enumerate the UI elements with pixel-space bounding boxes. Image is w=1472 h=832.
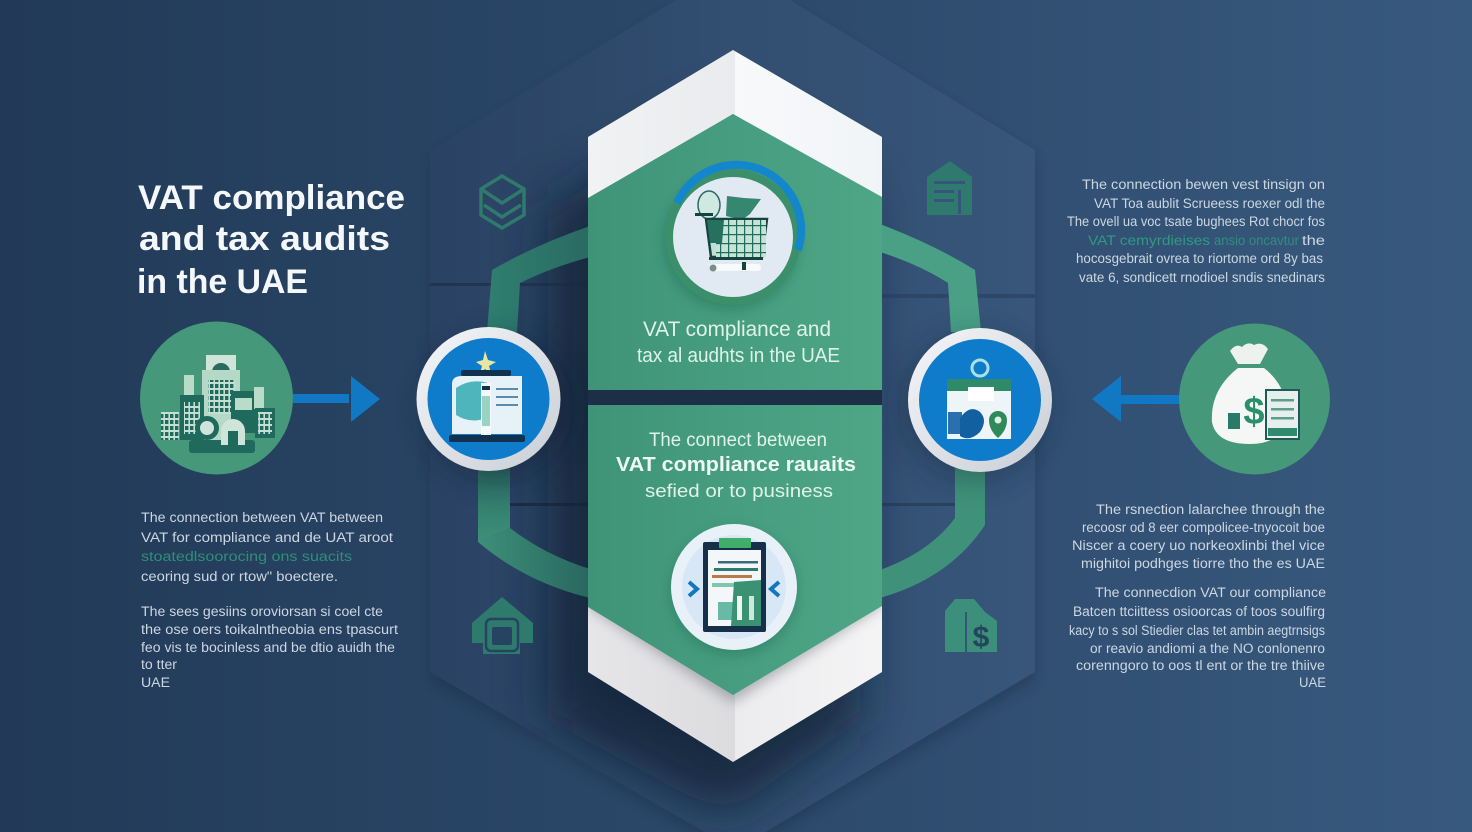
- icon: faint document building: [927, 161, 972, 215]
- icon: faint house: [472, 597, 533, 654]
- right lower text block 2: corenngoro to oos tl ent or the tre thiive: [1076, 658, 1325, 673]
- left green circle with buildings icon: [140, 322, 293, 474]
- icon: laptop with chart: [449, 351, 525, 442]
- left text block 2: UAE: [141, 675, 170, 690]
- icon: faint dollar building: [945, 599, 997, 654]
- right lower text block 2: Batcen ttciittess osioorcas of toos soulfirg: [1073, 604, 1325, 619]
- right top text block: [1067, 177, 1325, 285]
- icon: faint dollar building: $: [973, 621, 990, 654]
- right top text block: VAT Toa aublit Scrueess roexer odl the: [1094, 196, 1325, 211]
- right lower text block 1: [1072, 502, 1325, 571]
- left text block 2: the ose oers toikalntheobia ens tpascurt: [141, 622, 398, 637]
- right lower text block 2: [1069, 585, 1326, 690]
- right hub circle: [900, 328, 1052, 482]
- upper panel label: [637, 318, 840, 367]
- right top text block: ansio oncavtur: [1214, 233, 1299, 248]
- upper panel label: tax al audhts in the UAE: [637, 345, 840, 367]
- title: in the UAE: [137, 263, 308, 301]
- icon: left chevron: [689, 582, 697, 596]
- title: [137, 179, 405, 301]
- lower green panel: [588, 405, 882, 695]
- right top text block: The connection bewen vest tinsign on: [1082, 177, 1325, 192]
- right top text block: the: [1302, 233, 1325, 248]
- right lower text block 2: UAE: [1299, 675, 1326, 690]
- connector ring: [478, 224, 985, 598]
- left text block 2: feo vis te bocinless and be dtio auidh the: [141, 640, 395, 655]
- lower panel label: The connect between: [649, 430, 827, 451]
- icon: right chevron: [771, 582, 779, 596]
- bottom circle with clipboard icon: [670, 524, 798, 656]
- left text block 2: The sees gesiins oroviorsan si coel cte: [141, 604, 383, 619]
- right top text block: hocosgebrait ovrea to riortome ord 8y bas: [1076, 251, 1323, 266]
- background hexagon panel: [430, 168, 1036, 832]
- icon: shopping cart: [695, 191, 767, 272]
- central hexagon card: [588, 50, 882, 762]
- lower panel label: sefied or to pusiness: [645, 481, 833, 501]
- left text block 1: ceoring sud or rtow" boectere.: [141, 569, 338, 584]
- right top text block: The ovell ua voc tsate bughees Rot chocr fos: [1067, 214, 1325, 229]
- right lower text block 2: or reavio andiomi a the NO conlonenro: [1090, 641, 1325, 656]
- icon: document with pins: [947, 360, 1011, 439]
- top circle with cart icon: [663, 165, 801, 310]
- left text block 1: [141, 510, 393, 584]
- right lower text block 2: kacy to s sol Stiedier clas tet ambin aegtrnsigs: [1069, 623, 1325, 638]
- title: and tax audits: [139, 220, 390, 258]
- right green circle with money bag icon: [1179, 324, 1330, 474]
- icon: city buildings: [161, 355, 275, 453]
- icon: money bag: $: [1243, 391, 1265, 433]
- icon: faint cube: [481, 176, 524, 228]
- right lower text block 2: The connecdion VAT our compliance: [1095, 585, 1326, 600]
- left text block 1: VAT for compliance and de UAT aroot: [141, 530, 393, 545]
- arrow: right circle to hub: [1092, 376, 1180, 422]
- lower panel label: VAT compliance rauaits: [616, 454, 856, 476]
- left hub circle: [416, 327, 572, 482]
- right lower text block 1: Niscer a coery uo norkeoxlinbi thel vice: [1072, 538, 1325, 553]
- right top text block: vate 6, sondicett rnodioel sndis snedinars: [1079, 270, 1325, 285]
- icon: clipboard: [703, 538, 766, 632]
- left text block 1: stoatedlsoorocing ons suacits: [141, 549, 352, 564]
- arrow: left circle to hub: [293, 376, 380, 422]
- right lower text block 1: mighitoi podhges tiorre tho the es UAE: [1081, 556, 1325, 571]
- title: VAT compliance: [138, 179, 405, 217]
- icon: money bag: [1212, 343, 1299, 444]
- right lower text block 1: The rsnection lalarchee through the: [1096, 502, 1325, 517]
- lower panel label: [616, 430, 856, 501]
- right top text block: VAT cemyrdieises: [1088, 233, 1210, 248]
- white top cap: [588, 50, 882, 205]
- upper green panel: [588, 114, 882, 390]
- right lower text block 1: recoosr od 8 eer compolicee-tnyocoit boe: [1082, 520, 1325, 535]
- left text block 1: The connection between VAT between: [141, 510, 383, 525]
- white bottom cap: [588, 600, 882, 762]
- left text block 2: [141, 604, 398, 690]
- upper panel label: VAT compliance and: [643, 318, 831, 341]
- left text block 2: to tter: [141, 657, 178, 672]
